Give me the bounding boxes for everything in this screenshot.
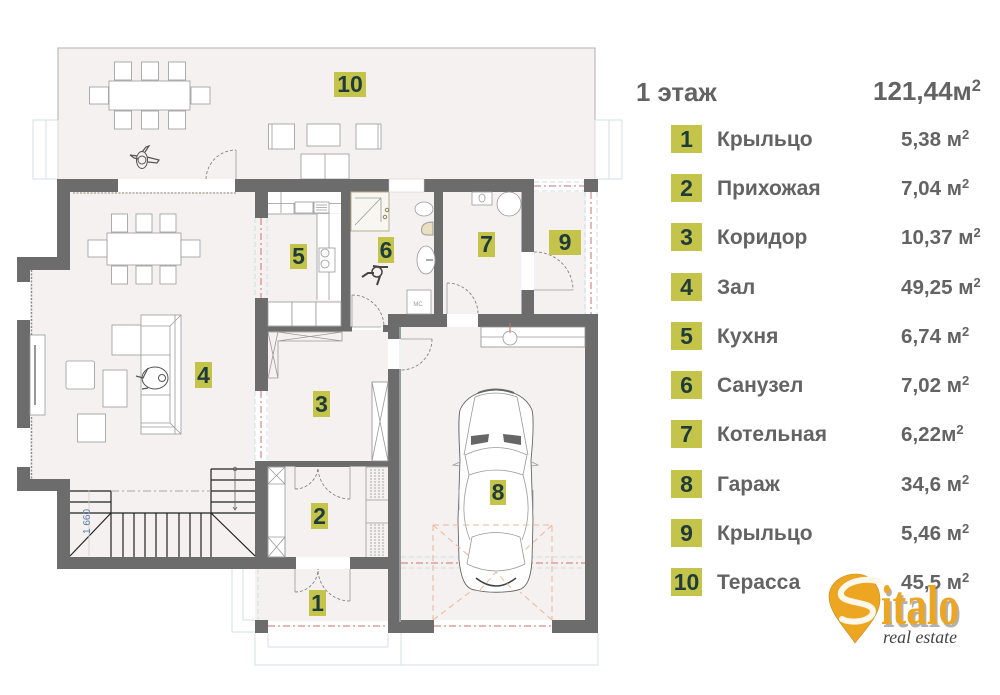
legend row 4: [671, 273, 981, 301]
floor total area: 121,44м: [873, 76, 972, 106]
legend row 5: [671, 322, 969, 350]
legend row 4: 2: [974, 275, 981, 290]
legend row 8: 8: [680, 471, 693, 497]
garage door swing: [433, 525, 552, 620]
legend row 10: 10: [674, 569, 699, 595]
room label 4: 4: [197, 362, 210, 388]
staircase: [70, 467, 255, 557]
legend row 10: Терасса: [717, 571, 801, 594]
legend row 9: 5,46 м: [901, 522, 962, 545]
dashed structure lines: [255, 182, 597, 626]
room label 5: 5: [292, 243, 305, 269]
legend row 5: 5: [680, 323, 693, 349]
legend row 1: 1: [680, 126, 693, 152]
logo: [829, 574, 961, 647]
legend row 3: Коридор: [717, 226, 807, 249]
living room furniture: [66, 315, 181, 442]
garage boiler unit: [481, 323, 585, 347]
logo wordmark: italo: [883, 578, 961, 640]
logo tagline: real estate: [883, 627, 957, 647]
room label 9: [549, 229, 581, 255]
room label 10: 10: [337, 71, 363, 97]
legend row 3: [671, 223, 981, 251]
terrace door: [206, 150, 236, 179]
legend row 4: Зал: [717, 276, 755, 299]
legend row 8: [671, 470, 969, 498]
legend row 8: 2: [962, 472, 969, 487]
hall closets and doors: [268, 466, 388, 601]
legend row 5: 6,74 м: [901, 325, 962, 348]
legend row 6: [671, 371, 969, 399]
room floors: [30, 192, 586, 621]
legend row 5: 2: [962, 324, 969, 339]
legend row 9: Крыльцо: [717, 522, 813, 545]
room 4 dining set: [88, 214, 200, 284]
garage door opening and door: [388, 327, 432, 622]
terrace floor: [58, 48, 595, 179]
legend row 8: Гараж: [717, 473, 781, 496]
boiler room fixtures: [472, 192, 521, 216]
floor plan: [17, 48, 622, 665]
bathroom fixtures: [351, 192, 435, 314]
legend row 7: [671, 420, 964, 448]
legend row 1: [671, 125, 969, 153]
legend row 3: 3: [680, 224, 693, 250]
legend row 10: 45,5 м: [901, 571, 962, 594]
floor total area: 2: [972, 77, 981, 95]
legend row 2: 2: [680, 175, 693, 201]
legend row 1: Крыльцо: [717, 128, 813, 151]
legend: [671, 125, 981, 596]
logo pin icon: [829, 574, 880, 643]
legend row 9: 9: [680, 520, 693, 546]
legend row 3: 10,37 м: [901, 226, 974, 249]
legend row 7: 7: [680, 421, 693, 447]
legend row 9: 2: [962, 521, 969, 536]
staircase: 1 660: [82, 509, 93, 534]
floor heading: 1 этаж: [636, 79, 717, 107]
legend row 4: 49,25 м: [901, 276, 974, 299]
legend row 7: 2: [956, 422, 964, 437]
legend row 2: Прихожая: [717, 177, 821, 200]
terrace lounge: [268, 124, 381, 179]
legend row 10: 2: [962, 570, 969, 585]
legend row 7: 6,22м: [901, 423, 956, 446]
legend row 6: 6: [680, 372, 693, 398]
legend row 9: [671, 519, 969, 547]
room label 3: 3: [315, 391, 328, 417]
legend row 2: [671, 174, 969, 202]
walls: [17, 179, 598, 633]
legend row 1: 5,38 м: [901, 128, 962, 151]
legend row 10: [671, 568, 969, 596]
legend row 3: 2: [974, 225, 981, 240]
legend row 1: 2: [962, 127, 969, 142]
room label 7: 7: [480, 231, 493, 257]
curtains: [32, 193, 237, 480]
legend row 2: 2: [962, 176, 969, 191]
legend row 8: 34,6 м: [901, 473, 962, 496]
legend row 2: 7,04 м: [901, 177, 962, 200]
room label 2: 2: [313, 503, 326, 529]
legend row 4: 4: [680, 274, 693, 300]
doors, bathroom and boiler room: [352, 179, 573, 327]
legend row 6: 2: [962, 373, 969, 388]
room label 1: 1: [311, 590, 324, 616]
terrace furniture: dining set: [90, 62, 210, 129]
room label 8: 8: [492, 479, 505, 505]
room label 9: 9: [559, 229, 571, 255]
terrace person: [130, 146, 159, 168]
fireplace: [30, 335, 45, 415]
kitchen units: [268, 192, 341, 326]
bathroom fixtures: МС: [413, 302, 423, 308]
car: [453, 390, 538, 592]
logo wordmark: italo: [881, 575, 959, 637]
room label 6: 6: [380, 237, 392, 263]
legend row 5: Кухня: [717, 325, 778, 348]
legend row 7: Котельная: [717, 423, 827, 446]
legend row 6: 7,02 м: [901, 374, 962, 397]
corridor wardrobes: [268, 332, 388, 461]
legend row 6: Санузел: [717, 374, 803, 397]
living room person: [136, 367, 168, 389]
outdoor steps outlines: [33, 120, 622, 665]
